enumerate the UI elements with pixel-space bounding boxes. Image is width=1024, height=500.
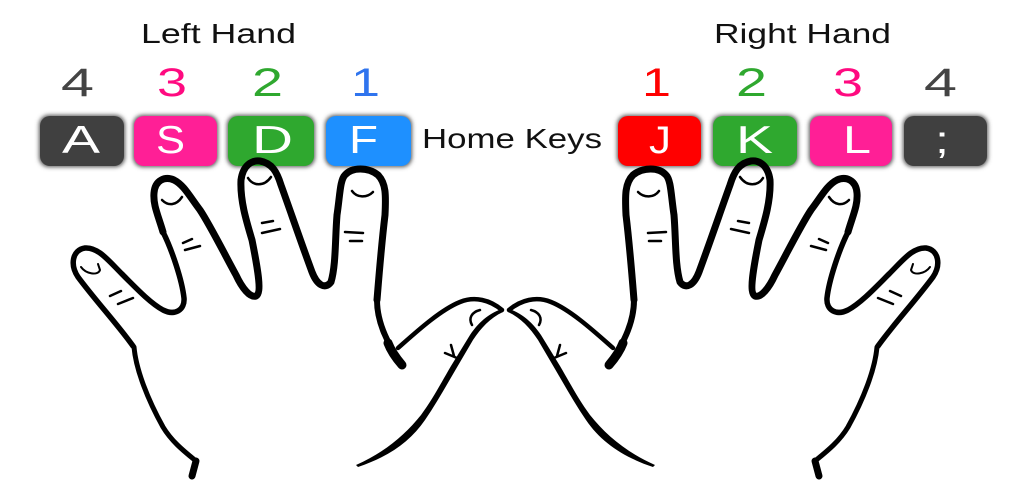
key J [618,116,701,166]
key K [713,116,797,166]
left hand finger numbers: 1 [351,61,380,105]
key K: K [736,119,773,162]
right hand finger numbers: 2 [736,61,767,105]
key D [228,116,314,166]
key A [40,116,124,166]
left home keys [40,116,411,166]
key shadows [39,115,988,167]
left hand finger numbers [61,61,380,105]
key L: L [843,119,871,162]
key S: S [156,119,185,162]
key F: F [349,119,378,162]
key L [810,116,892,166]
left hand finger numbers: 4 [61,61,94,105]
key semicolon: ; [935,119,949,162]
key A: A [62,119,100,162]
heading: left hand: Left Hand [141,18,296,49]
right hand finger numbers: 4 [924,61,957,105]
left hand finger numbers: 3 [157,61,187,105]
illustration: right hand [508,161,938,476]
right home keys [618,116,987,166]
key S [134,116,217,166]
illustration: left hand [73,161,503,476]
left hand finger numbers: 2 [252,61,283,105]
right hand finger numbers: 1 [642,61,671,105]
label: home keys: Home Keys [422,123,602,154]
key semicolon [904,116,987,166]
key F [326,116,411,166]
heading: right hand: Right Hand [714,18,891,49]
key J: J [649,119,671,162]
right hand finger numbers [642,61,957,105]
right hand finger numbers: 3 [833,61,863,105]
key D: D [252,119,293,162]
